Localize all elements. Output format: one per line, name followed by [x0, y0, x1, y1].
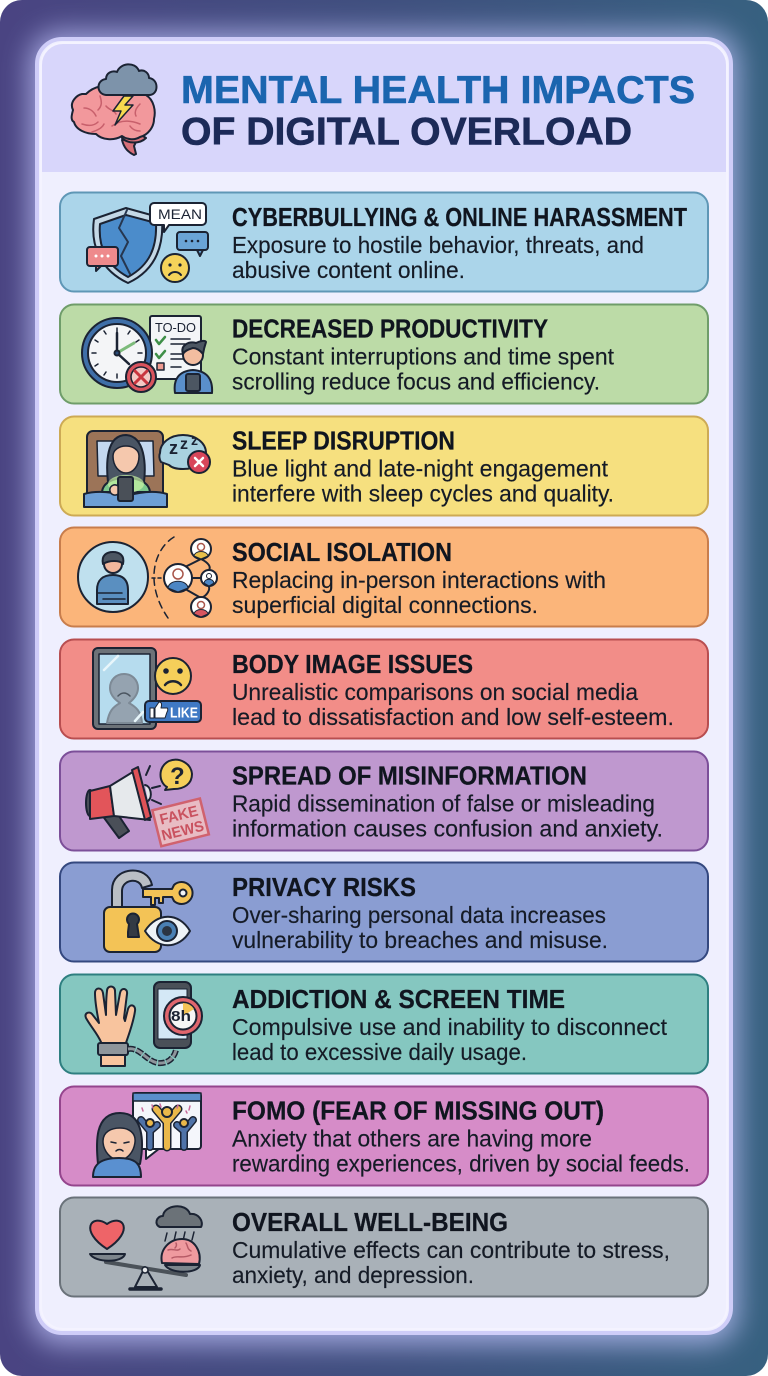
icon: clock, to-do list and man [82, 316, 212, 393]
icon label: like: LIKE [170, 706, 198, 722]
heading and text: FOMO (FEAR OF MISSING OUT) [232, 1098, 604, 1126]
heading and text: SOCIAL ISOLATION [232, 539, 452, 567]
heading and text [232, 874, 608, 953]
heading and text: Exposure to hostile behavior, threats, and [232, 232, 644, 258]
heading and text [232, 986, 668, 1065]
heading and text: lead to excessive daily usage. [232, 1039, 527, 1065]
title: OF DIGITAL OVERLOAD [181, 110, 632, 154]
card 3: sleep [60, 416, 708, 516]
icon label: zzz: z [180, 436, 188, 453]
heading and text [232, 316, 615, 394]
icon: megaphone, question bubble and fake news stamp [86, 760, 192, 838]
heading and text: Cumulative effects can contribute to stress, [232, 1237, 670, 1263]
card 7: privacy [60, 862, 708, 962]
icon: woman on phone in bed [84, 431, 210, 507]
card 4: isolation [60, 528, 708, 626]
title [181, 69, 695, 154]
icon label: zzz: z [191, 432, 198, 448]
heading and text: scrolling reduce focus and efficiency. [232, 368, 600, 394]
icon label: zzz [169, 432, 198, 458]
icon: person in bubble and network [78, 537, 217, 618]
icon: fake news stamp [152, 798, 209, 846]
heading and text: Blue light and late-night engagement [232, 456, 609, 482]
heading and text: Compulsive use and inability to disconnect [232, 1014, 668, 1040]
heading and text [232, 1098, 690, 1176]
heading and text: Constant interruptions and time spent [232, 344, 615, 370]
icon: fake news stamp: NEWS [160, 818, 206, 845]
icon: brain under storm cloud [72, 64, 156, 155]
card 6: misinformation [60, 752, 708, 850]
icon: sad woman watching party window [93, 1093, 201, 1177]
icon label: mean: MEAN [158, 206, 202, 222]
heading and text: DECREASED PRODUCTIVITY [232, 316, 548, 344]
heading and text: PRIVACY RISKS [232, 874, 416, 902]
heading and text: Anxiety that others are having more [232, 1126, 592, 1152]
heading and text: information causes confusion and anxiety. [232, 816, 663, 842]
icon label: to-do: TO-DO [155, 321, 196, 335]
heading and text: CYBERBULLYING & ONLINE HARASSMENT [232, 204, 687, 232]
icon: chained hand, phone and timer [86, 982, 202, 1066]
heading and text: interfere with sleep cycles and quality. [232, 480, 614, 506]
card 2: productivity [60, 304, 708, 404]
heading and text [232, 539, 606, 618]
heading and text [232, 204, 687, 283]
heading and text: Rapid dissemination of false or misleading [232, 790, 655, 816]
card 5: body image [60, 640, 708, 738]
heading and text: rewarding experiences, driven by social feeds. [232, 1150, 690, 1176]
card 9: fomo [60, 1086, 708, 1186]
card 10: well-being [60, 1198, 708, 1296]
icon: mirror with sad reflection and like badge [93, 648, 201, 729]
heading and text: abusive content online. [232, 257, 465, 283]
icon: scale with heart and stormy brain [90, 1206, 202, 1289]
card 1: cyberbullying [60, 192, 708, 292]
heading and text: Over-sharing personal data increases [232, 902, 606, 928]
heading and text [232, 651, 674, 730]
heading and text [232, 428, 614, 506]
icon: fake news stamp: FAKE [158, 803, 200, 829]
icon: broken shield [87, 203, 208, 283]
icon label: question mark: ? [170, 763, 185, 790]
heading and text: superficial digital connections. [232, 592, 538, 618]
card 8: addiction [60, 974, 708, 1074]
heading and text [232, 1209, 670, 1288]
heading and text: OVERALL WELL-BEING [232, 1209, 508, 1237]
heading and text: lead to dissatisfaction and low self-esteem. [232, 704, 674, 730]
heading and text [232, 762, 663, 842]
heading and text: ADDICTION & SCREEN TIME [232, 986, 565, 1014]
heading and text: SPREAD OF MISINFORMATION [232, 762, 587, 790]
heading and text: Unrealistic comparisons on social media [232, 679, 638, 705]
icon: open padlock, key and eye [104, 871, 193, 952]
icon label: zzz: z [169, 438, 178, 458]
title: MENTAL HEALTH IMPACTS [181, 69, 695, 112]
heading and text: Replacing in-person interactions with [232, 567, 606, 593]
heading and text: vulnerability to breaches and misuse. [232, 927, 608, 953]
heading and text: SLEEP DISRUPTION [232, 428, 455, 456]
heading and text: anxiety, and depression. [232, 1262, 474, 1288]
heading and text: BODY IMAGE ISSUES [232, 651, 473, 679]
icon label: 8h: 8h [171, 1009, 191, 1025]
